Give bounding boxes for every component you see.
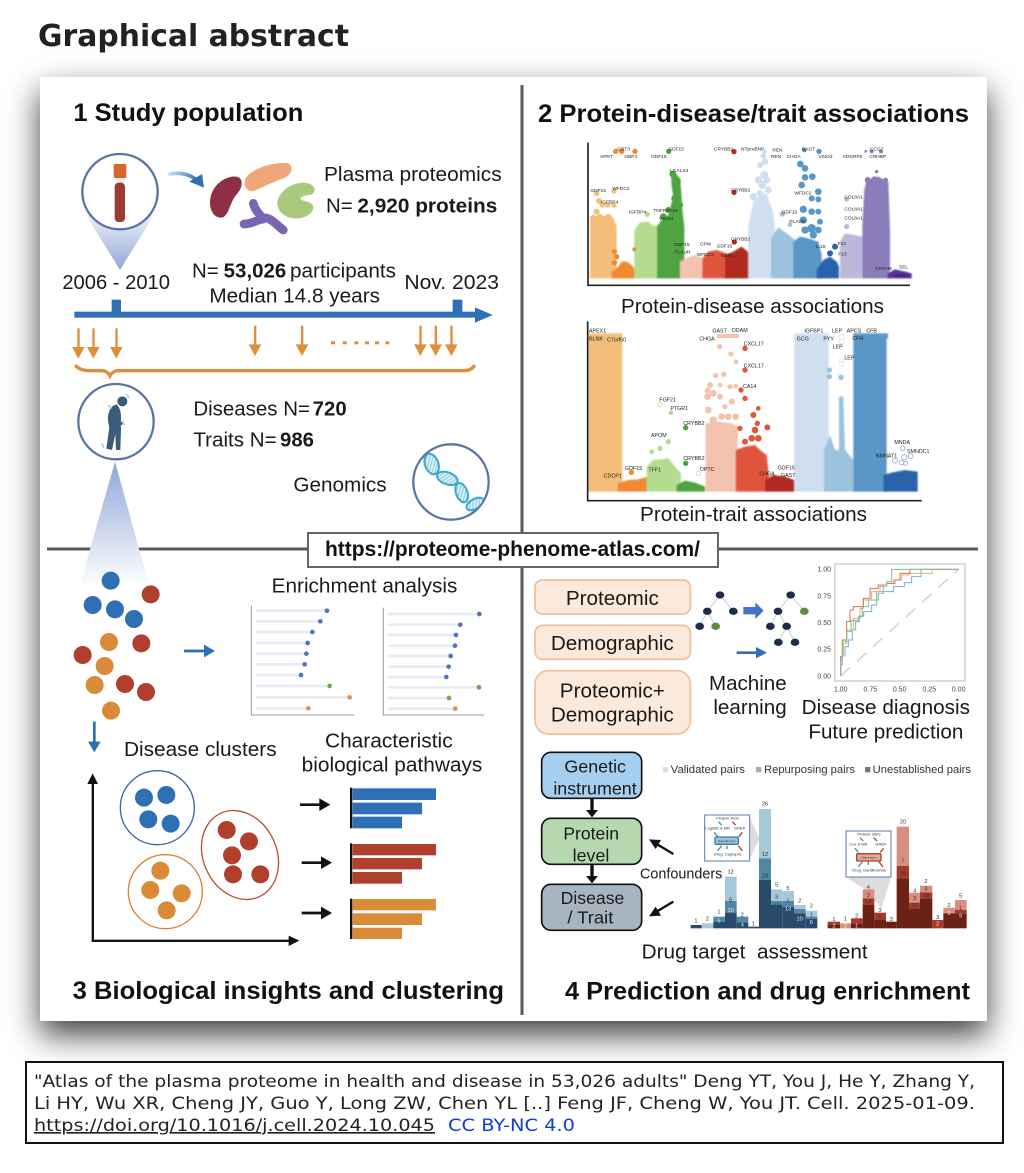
- box: protein level: level: [573, 846, 609, 866]
- box: proteomic plus demographic: Proteomic+: [560, 679, 665, 702]
- inset: red drug target diagram: Depression: [861, 856, 877, 860]
- chart: protein-trait manhattan plot: GCG: [797, 337, 809, 343]
- label: disease diagnosis, future prediction: Future prediction: [808, 720, 963, 743]
- chart: blue drug target bars: 2: [706, 917, 709, 923]
- chart: protein-disease manhattan plot: GDF15: [590, 188, 606, 194]
- chart: red drug target bars: 12: [912, 903, 918, 909]
- chart: blue drug target bars: 1: [752, 921, 755, 927]
- chart: red drug target bars: 2: [855, 914, 858, 920]
- chart: red drug target bars: 3: [913, 896, 916, 902]
- chart: protein-disease manhattan plot: COL8A1: [844, 206, 863, 212]
- chart: blue drug target bars: 5: [775, 882, 778, 888]
- citation box: "Atlas of the plasma proteome in health and disease in 53,026 adults" Deng YT, You J, He Y, Zhang Y,: [34, 1072, 975, 1091]
- chart: protein-trait manhattan plot: CXCL17: [744, 363, 764, 369]
- chart: protein-trait manhattan plot: CHGA: [699, 337, 715, 343]
- box: proteomic: Proteomic: [566, 587, 659, 610]
- chart: red drug target bars: 4: [867, 885, 870, 891]
- heading: biological insights and clustering: 3 Biological insights and clustering: [73, 977, 504, 1005]
- icon: DNA: [413, 444, 489, 520]
- citation box: Li HY, Wu XR, Cheng JY, Guo Y, Long ZW, Chen YL [..] Feng JF, Cheng W, You JT. Cell. 2025-01-09.: [34, 1094, 975, 1113]
- text: end date: Nov. 2023: [404, 271, 499, 294]
- label: protein-trait associations: Protein-trait associations: [640, 503, 867, 526]
- inset: red drug target diagram: Drug: Gantiltromab: [852, 868, 887, 873]
- chart: protein-disease manhattan plot: GDF15: [651, 154, 667, 160]
- chart: blue drug target bars: 1: [810, 912, 813, 918]
- text: diseases and traits: 986: [280, 429, 314, 452]
- chart: protein-disease manhattan plot: F13: [838, 241, 846, 247]
- chart: protein-trait manhattan plot: GDF15: [778, 465, 795, 471]
- scattered protein dots: [74, 572, 160, 720]
- chart: red drug target bars: 2: [832, 924, 836, 930]
- bars: blue pathways: [350, 788, 436, 828]
- citation box: [26, 1062, 1003, 1143]
- text: participants and follow-up: N=: [192, 260, 219, 283]
- bars: orange pathways: [350, 899, 436, 939]
- label: protein-disease associations: Protein-disease associations: [621, 295, 884, 318]
- chart: protein-disease manhattan plot: WFDC2: [612, 186, 630, 192]
- chart: red drug target bars: 1: [832, 917, 836, 923]
- chart: red drug target bars: 2: [947, 903, 951, 909]
- text: genomics: Genomics: [293, 473, 387, 496]
- chart: protein-trait manhattan plot: TFF1: [648, 467, 661, 473]
- chart: protein-trait manhattan plot: GAST: [712, 329, 728, 335]
- chart: protein-trait manhattan plot: CFB: [866, 328, 877, 334]
- arrows: clusters to pathways: [300, 798, 332, 919]
- chart: protein-disease manhattan plot: IL19: [816, 244, 826, 250]
- funnel under blood tube: [86, 215, 154, 270]
- chart: blue drug target bars: 26: [762, 802, 768, 808]
- inset: blue drug target diagram: Protein: ACE: [716, 816, 739, 821]
- chart: red drug target bars: 3: [867, 893, 870, 899]
- text: participants and follow-up: participants: [290, 260, 396, 283]
- chart: cluster axes: [87, 773, 299, 946]
- chart: protein-trait manhattan plot: CRYBB2: [683, 456, 705, 462]
- panel: 1 study population: [62, 99, 502, 587]
- box: proteomic plus demographic: Demographic: [551, 704, 674, 727]
- label: enrichment analysis: Enrichment analysis: [272, 574, 457, 597]
- chart: red drug target bars: 2: [924, 879, 928, 885]
- chart: blue drug target bars: 1: [694, 918, 698, 924]
- text: plasma proteomics: 2,920 proteins: [357, 194, 497, 217]
- chart: protein-disease manhattan plot: MZB1: [895, 273, 908, 279]
- chart: protein-disease manhattan plot: REN: [772, 147, 783, 153]
- chart: protein-disease manhattan plot: ADGRF5: [843, 154, 863, 160]
- chart: red drug target bars: 5: [959, 894, 962, 900]
- label: characteristic biological pathways: biological pathways: [302, 753, 482, 776]
- chart: protein-disease manhattan plot: [588, 143, 912, 285]
- brace: [75, 365, 475, 376]
- chart: protein-disease manhattan plot: CRYBB2: [731, 187, 751, 193]
- inset: blue drug target diagram: [705, 815, 750, 861]
- chart: blue drug target bars: 2: [798, 899, 801, 905]
- chart: red drug target bars: 20: [900, 820, 906, 826]
- box: genetic instrument: [542, 752, 642, 798]
- icon: decision tree left: [695, 591, 738, 630]
- chart: protein-trait manhattan plot: C7orf50: [607, 338, 626, 344]
- box: genetic instrument: Genetic: [564, 757, 626, 777]
- box: proteomic: [535, 580, 690, 614]
- chart: protein-disease manhattan plot: REN: [771, 154, 782, 160]
- label: machine learning: learning: [713, 696, 787, 719]
- arrow: to enrichment: [184, 645, 215, 657]
- icon: blood tube: [82, 154, 158, 229]
- text: plasma proteomics: N=: [326, 194, 353, 217]
- chart: protein-trait manhattan plot: BLNK: [589, 337, 603, 343]
- chart: protein-trait manhattan plot: FGF21: [659, 397, 676, 403]
- legend: Validated pairs: [671, 764, 745, 776]
- text: plasma proteomics: [324, 163, 502, 217]
- chart: red drug target bars: 18: [923, 893, 929, 899]
- chart: red drug target bars: 3: [936, 915, 939, 921]
- text: diseases and traits: [193, 398, 347, 452]
- chart: protein-trait manhattan plot: LEP: [833, 345, 843, 351]
- box: demographic: Demographic: [551, 632, 674, 655]
- panel: 4 prediction and drug enrichment, lower part: [542, 752, 971, 1005]
- chart: protein-disease manhattan plot: NTproBNP: [741, 147, 764, 153]
- chart: ROC curves: 1.00: [834, 687, 848, 694]
- chart: protein-disease manhattan plot: PLAUR: [789, 219, 806, 225]
- chart: enrichment lollipop right: [383, 608, 484, 715]
- label: disease clusters: Disease clusters: [124, 738, 277, 761]
- chart: blue drug target bars: 4: [741, 922, 744, 928]
- chart: red drug target bars: 1: [844, 917, 847, 923]
- chart: blue drug target bars: 1: [717, 910, 721, 916]
- chart: blue drug target bars: 13: [785, 907, 791, 913]
- chart: ROC curves: 0.50: [817, 620, 831, 627]
- chart: blue drug target bars: 6: [810, 920, 813, 926]
- text: participants and follow-up: [192, 260, 396, 307]
- chart: ROC curves: [817, 564, 966, 694]
- text: participants and follow-up: Median 14.8 years: [209, 284, 380, 307]
- box: protein level: Protein: [563, 824, 619, 844]
- chart: protein-trait manhattan plot: PYY: [823, 337, 834, 343]
- chart: red drug target bars: 3: [890, 917, 893, 923]
- chart: blue drug target bars: 12: [728, 870, 734, 876]
- chart: enrichment lollipop left: [251, 606, 354, 715]
- arrow: to machine learning: [737, 647, 767, 658]
- legend: Unestablished pairs: [873, 764, 971, 776]
- panel: main figure background: [40, 77, 987, 1021]
- chart: protein-trait manhattan plot: NMNAT1: [876, 453, 897, 459]
- chart: protein-disease manhattan plot: GBP4: [624, 154, 638, 160]
- chart: protein-trait manhattan plot: CHGA: [759, 472, 775, 478]
- chart: protein-trait manhattan plot: IGFBP1: [804, 329, 823, 335]
- chart: red drug target bars: 1: [855, 924, 858, 930]
- chart: red drug target bars: 5: [878, 915, 882, 921]
- arrow: between trees: [743, 602, 764, 619]
- text: start date: 2006 - 2010: [62, 271, 170, 294]
- inset: blue drug target diagram: Hypertension: [718, 839, 736, 843]
- chart: protein-trait manhattan plot: APEX1: [589, 329, 606, 335]
- label: confounders: Confounders: [640, 866, 722, 882]
- heading: protein-disease/trait associations: 2 Protein-disease/trait associations: [538, 100, 969, 128]
- panel: 3 biological insights and clustering: [73, 572, 504, 1005]
- inset: blue drug target diagram: Logistic & MR: [705, 826, 730, 831]
- chart: protein-disease manhattan plot: GDF15: [782, 209, 798, 215]
- chart: protein-trait manhattan plot: LEP: [832, 329, 843, 335]
- text: plasma proteomics: Plasma proteomics: [324, 163, 502, 186]
- inset: red drug target diagram: [846, 831, 891, 877]
- chart: protein-disease manhattan plot: WFDC2: [794, 191, 812, 197]
- inset: blue drug target diagram: GREP: [734, 826, 746, 831]
- chart: red drug target bars: 14: [865, 900, 871, 906]
- chart: protein-trait manhattan plot: CFH: [852, 336, 863, 342]
- chart: protein-disease manhattan plot: CRHBP: [869, 154, 886, 160]
- chart: protein-disease manhattan plot: GDF15: [668, 147, 684, 153]
- box: disease or trait: [542, 884, 642, 930]
- chart: protein-disease manhattan plot: CRTAM: [875, 266, 892, 272]
- label: machine learning: Machine: [709, 672, 787, 695]
- chart: protein-disease manhattan plot: F13: [838, 251, 847, 257]
- text: diseases and traits: Diseases N=: [193, 398, 310, 421]
- chart: protein-disease manhattan plot: GBT3: [617, 147, 630, 153]
- text: diseases and traits: Traits N=: [193, 429, 277, 452]
- chart: protein-disease manhattan plot: TNFRSF1A: [653, 208, 679, 214]
- chart: protein-disease manhattan plot: CPM: [700, 241, 711, 247]
- legend: [663, 764, 971, 776]
- orange event arrows: [72, 326, 458, 359]
- chart: protein-trait manhattan plot: CRYBB2: [683, 421, 705, 427]
- chart: protein-trait manhattan plot: OPTC: [700, 467, 715, 473]
- divider lines: [47, 85, 978, 1015]
- chart: ROC curves: 0.25: [923, 687, 936, 694]
- chart: protein-trait manhattan plot: APOM: [651, 433, 667, 439]
- panel: 2 protein-disease/trait associations: [538, 100, 969, 526]
- chart: protein-disease manhattan plot: IGFBP4: [601, 199, 618, 205]
- chart: blue drug target bars: 10: [797, 916, 803, 922]
- chart: protein-trait manhattan plot: APCS: [847, 329, 862, 335]
- inset: red drug target diagram: Cox & MR: [849, 842, 868, 847]
- label: machine learning: [709, 672, 787, 719]
- chart: protein-disease manhattan plot: WFDC2: [697, 252, 714, 258]
- icon: patient: [78, 384, 154, 459]
- chart: blue drug target bars: 5: [786, 886, 790, 892]
- panel: 4 prediction and drug enrichment, upper part: [535, 564, 970, 743]
- chart: blue drug target bars: 3: [775, 895, 778, 901]
- chart: protein-disease manhattan plot: VSIG2: [818, 154, 833, 160]
- chart: blue drug target bars: 13: [774, 903, 780, 909]
- arrows: causal chain: [586, 798, 598, 883]
- timeline arrow: [74, 300, 493, 323]
- citation box: https://doi.org/10.1016/j.cell.2024.10.045: [34, 1116, 435, 1135]
- inset: red drug target diagram: Protein: BSG: [857, 832, 881, 837]
- cluster: blue: [120, 771, 194, 845]
- chart: ROC curves: 1.00: [817, 567, 831, 574]
- chart: red drug target bars: 3: [878, 908, 882, 914]
- chart: red drug target bars: [828, 820, 967, 930]
- box: protein level: [542, 818, 642, 866]
- chart: protein-disease manhattan plot: IGFBP4: [629, 209, 646, 215]
- cluster: red: [187, 798, 293, 912]
- chart: protein-disease manhattan plot: CRYBB2: [714, 147, 734, 153]
- chart: protein-disease manhattan plot: CHGA: [787, 154, 801, 160]
- text: diseases and traits: 720: [313, 398, 347, 421]
- funnel under patient: [79, 462, 149, 587]
- chart: protein-disease manhattan plot: APRT: [600, 154, 613, 160]
- chart: protein-disease manhattan plot: PLAUR: [674, 249, 691, 255]
- heading: study population: 1 Study population: [73, 99, 303, 127]
- chart: protein-trait manhattan plot: [588, 321, 930, 501]
- citation box: CC BY-NC 4.0: [448, 1116, 575, 1135]
- chart: blue drug target bars: 6: [729, 897, 732, 903]
- chart: protein-trait manhattan plot: MNDA: [894, 440, 910, 446]
- chart: protein-trait manhattan plot: CA14: [743, 384, 756, 390]
- chart: blue drug target bars: 2: [741, 912, 744, 918]
- chart: ROC curves: 0.00: [952, 687, 966, 694]
- label: characteristic biological pathways: [302, 729, 482, 776]
- chart: protein-trait manhattan plot: ODAM: [732, 328, 748, 334]
- inset: blue drug target diagram: Drug: Captopril: [714, 852, 741, 857]
- chart: blue drug target bars: 5: [717, 918, 721, 924]
- label: disease diagnosis, future prediction: Disease diagnosis: [802, 696, 970, 719]
- chart: red drug target bars: 2: [936, 921, 939, 927]
- chart: protein-trait manhattan plot: CDCP1: [604, 474, 622, 480]
- legend: Repurposing pairs: [764, 764, 855, 776]
- label: characteristic biological pathways: Characteristic: [325, 729, 453, 752]
- chart: protein-disease manhattan plot: CRYBB2: [731, 236, 751, 242]
- chart: protein-disease manhattan plot: GDF15: [717, 244, 733, 250]
- chart: blue drug target bars: 10: [728, 908, 734, 914]
- chart: protein-trait manhattan plot: GDF15: [625, 466, 642, 472]
- url banner: https://proteome-phenome-atlas.com/: [325, 538, 700, 561]
- chart: protein-trait manhattan plot: CXCL17: [744, 341, 764, 347]
- chart: protein-trait manhattan plot: GAST: [781, 473, 796, 479]
- arrows: confounders: [649, 839, 673, 916]
- chart: blue drug target bars: 28: [762, 874, 768, 880]
- cluster: orange: [128, 855, 202, 929]
- label: disease diagnosis, future prediction: [802, 696, 970, 743]
- chart: protein-disease manhattan plot: CCG7: [870, 147, 884, 153]
- chart: protein-trait manhattan plot: LEP: [844, 355, 855, 361]
- bars: red pathways: [350, 843, 436, 884]
- chart: blue drug target bars: [691, 802, 817, 928]
- box: disease or trait: / Trait: [567, 907, 613, 927]
- text: participants and follow-up: 53,026: [224, 260, 286, 283]
- box: disease or trait: Disease: [561, 888, 624, 908]
- inset: red drug target diagram: GREP: [875, 842, 887, 847]
- label: drug target assessment: Drug target assessment: [642, 940, 868, 963]
- chart: protein-disease manhattan plot: COL8A1: [844, 195, 863, 201]
- chart: red drug target bars: 1: [844, 924, 847, 930]
- chart: red drug target bars: 9: [947, 911, 951, 917]
- chart: protein-disease manhattan plot: GDF15: [674, 242, 690, 248]
- chart: protein-disease manhattan plot: NEFL: [721, 253, 734, 259]
- icon: proteins: [212, 165, 313, 230]
- box: proteomic plus demographic: [535, 671, 690, 734]
- chart: protein-trait manhattan plot: PTGR1: [670, 406, 688, 412]
- chart: red drug target bars: 4: [913, 889, 916, 895]
- chart: red drug target bars: 3: [924, 887, 928, 893]
- chart: protein-disease manhattan plot: GAST: [802, 147, 815, 153]
- chart: red drug target bars: 7: [901, 859, 905, 865]
- chart: ROC curves: 0.00: [817, 673, 831, 680]
- heading: prediction and drug enrichment: 4 Prediction and drug enrichment: [565, 977, 971, 1005]
- chart: red drug target bars: 1: [959, 906, 962, 912]
- chart: protein-disease manhattan plot: LGALS4: [670, 168, 689, 174]
- chart: red drug target bars: 29: [900, 872, 906, 878]
- chart: ROC curves: 0.75: [817, 593, 831, 600]
- chart: blue drug target bars: 1: [786, 898, 790, 904]
- chart: red drug target bars: 9: [959, 914, 962, 920]
- chart: protein-disease manhattan plot: SEL: [899, 265, 908, 271]
- chart: ROC curves: 0.25: [817, 647, 831, 654]
- icon: decision tree right: [766, 591, 809, 646]
- title: Graphical abstract: [38, 19, 349, 54]
- chart: blue drug target bars: 12: [762, 852, 768, 858]
- chart: ROC curves: 0.75: [864, 687, 877, 694]
- box: demographic: [535, 625, 690, 659]
- url banner: [308, 533, 718, 567]
- chart: blue drug target bars: 2: [810, 904, 813, 910]
- chart: protein-disease manhattan plot: VSIG4: [659, 216, 674, 222]
- chart: protein-trait manhattan plot: SMNDC1: [907, 449, 930, 455]
- chart: protein-disease manhattan plot: COL8A1: [844, 215, 863, 221]
- arrow: tube to proteins: [168, 173, 204, 188]
- chart: ROC curves: 0.50: [893, 687, 907, 694]
- box: genetic instrument: instrument: [553, 778, 637, 798]
- arrow: to clusters: [88, 722, 101, 752]
